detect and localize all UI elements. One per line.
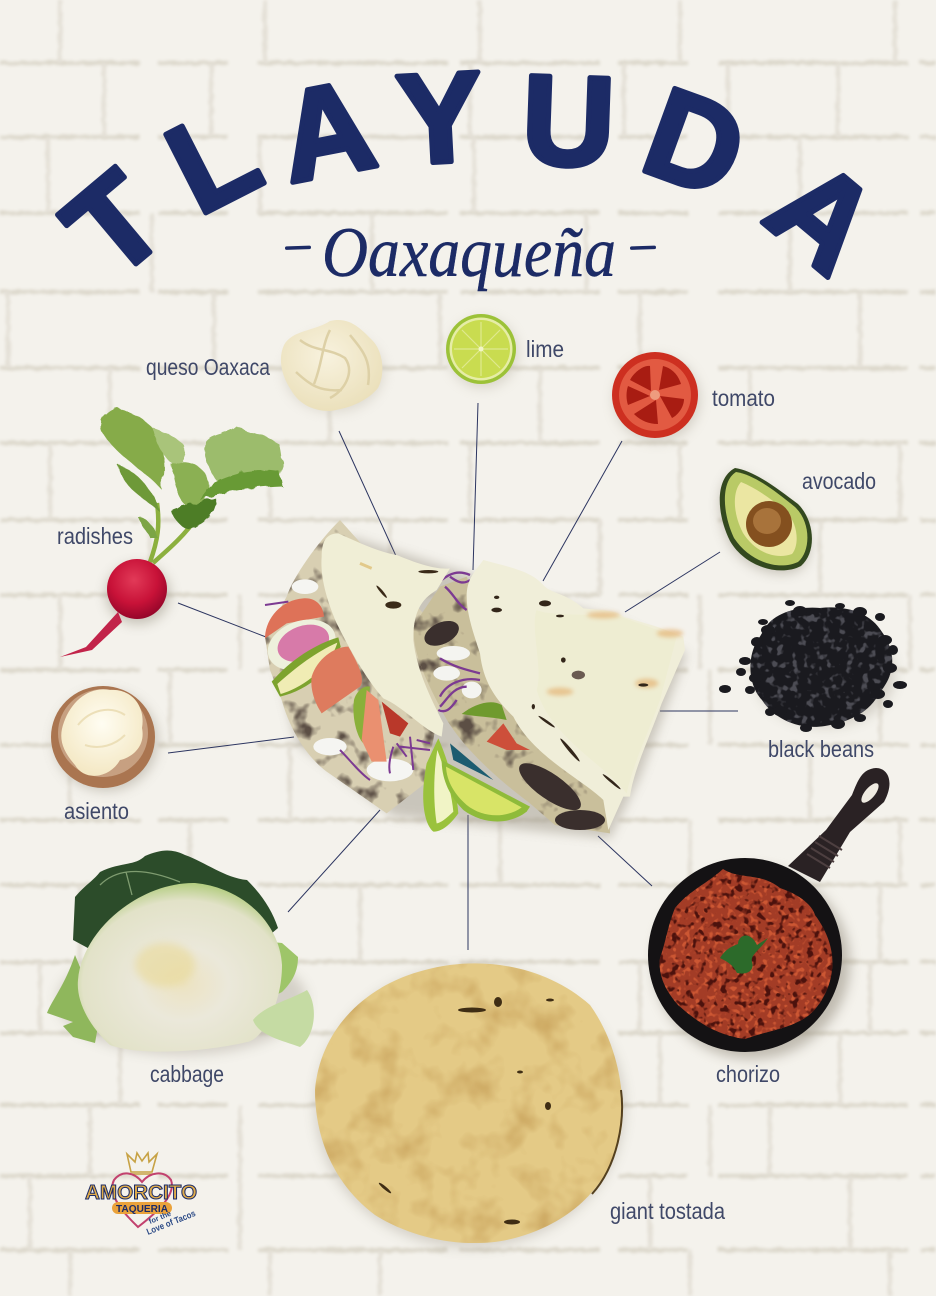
label: giant tostada: giant tostada [610, 1198, 725, 1224]
label: queso Oaxaca: queso Oaxaca [146, 354, 270, 380]
label: avocado: avocado [802, 468, 876, 494]
shadow [273, 537, 687, 838]
icon: asiento bowl [51, 686, 158, 791]
icon: black beans [719, 600, 907, 732]
title: TLAYUDA: D [627, 60, 763, 226]
leader lines [168, 403, 738, 950]
tomato slices [311, 647, 362, 713]
icon: avocado [720, 468, 812, 573]
label: tomato: tomato [712, 385, 775, 411]
purple cabbage [265, 602, 430, 780]
label: asiento: asiento [64, 798, 129, 824]
title: TLAYUDA: L [146, 79, 281, 242]
label: lime: lime [526, 336, 564, 362]
lime wedges [423, 738, 458, 832]
icon: crown [127, 1153, 157, 1174]
central illustration: tlayuda [261, 520, 687, 838]
label: chorizo: chorizo [716, 1061, 780, 1087]
logo: Amorcito Taqueria: Love of Tacos [145, 1208, 197, 1237]
title: TLAYUDA: A [742, 132, 904, 301]
icon: giant tostada [315, 963, 625, 1248]
second folded tortilla with beans [414, 577, 610, 833]
avocado slice [272, 637, 341, 697]
icon: lime [446, 314, 518, 388]
title: TLAYUDA: A [268, 52, 386, 210]
lower-left tortilla [265, 520, 450, 813]
label: cabbage: cabbage [150, 1061, 224, 1087]
title: TLAYUDA: T [39, 145, 191, 305]
label: radishes: radishes [57, 523, 133, 549]
title: TLAYUDA: Y [393, 45, 486, 192]
tomato slice [265, 598, 324, 638]
logo: Amorcito Taqueria: for the [147, 1209, 172, 1226]
watermelon radish [261, 610, 343, 680]
icon: chorizo skillet [648, 768, 889, 1059]
logo: Amorcito Taqueria: TAQUERIA [116, 1204, 168, 1215]
icon: heart [112, 1173, 172, 1227]
subtitle: Oaxaqueña: Oaxaqueña [322, 215, 616, 292]
logo: Amorcito Taqueria [85, 1153, 197, 1237]
title: TLAYUDA [39, 45, 904, 305]
icon: queso Oaxaca [281, 320, 384, 412]
icon: tomato [612, 352, 700, 442]
top-left tortilla fold [321, 533, 450, 737]
wordmark: AMORCITO [85, 1182, 197, 1204]
icon: radish with leaves [60, 408, 283, 657]
label: black beans: black beans [768, 736, 874, 762]
right tortilla fold [467, 560, 685, 830]
title: TLAYUDA: U [520, 48, 617, 195]
icon: cabbage [47, 851, 314, 1055]
